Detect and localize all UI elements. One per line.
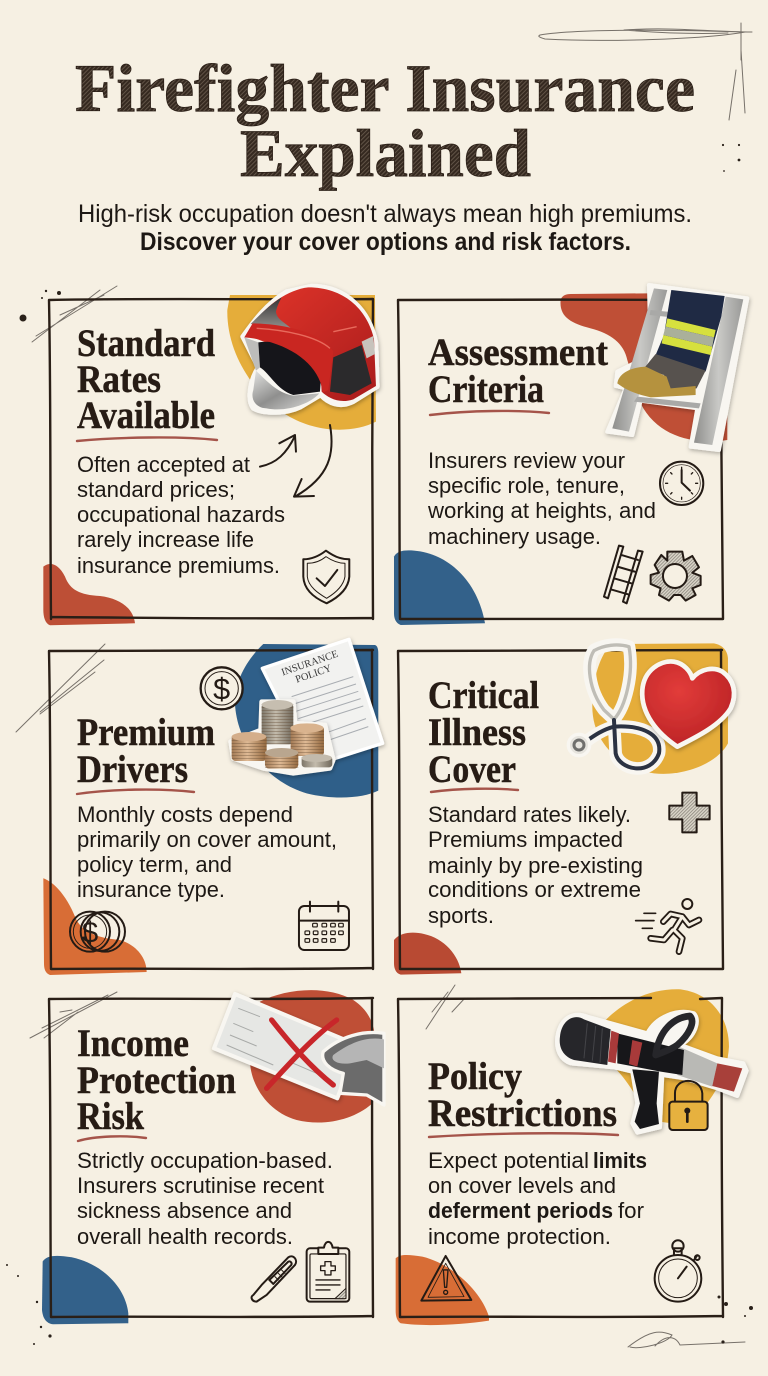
panel: policy restrictions (396, 989, 747, 1325)
body text: insurance premiums. (77, 553, 280, 578)
heading: Income (77, 1022, 189, 1065)
icon: warning triangle (421, 1256, 471, 1301)
heading: Drivers (77, 748, 188, 791)
heading: Rates (77, 358, 161, 401)
heading: Illness (428, 711, 526, 754)
body text: Insurers scrutinise recent (77, 1173, 324, 1198)
subtitle (78, 200, 692, 256)
body text: rarely increase life (77, 527, 254, 552)
icon: gear (651, 552, 701, 601)
body text: Monthly costs depend (77, 802, 293, 827)
body text: specific role, tenure, (428, 473, 625, 498)
illustration: insurance policy document: INSURANCE (280, 649, 340, 678)
body text: insurance type. (77, 877, 225, 902)
heading: Standard (77, 322, 215, 365)
body text: Expect potential (428, 1148, 589, 1173)
heading (428, 674, 539, 791)
icon: running person (636, 899, 699, 952)
icon: stacked coins (70, 912, 125, 952)
illustration: insurance policy document: POLICY (294, 663, 334, 686)
body text: policy term, and (77, 852, 232, 877)
heading: Critical (428, 674, 539, 717)
illustration: coin stacks (231, 700, 333, 773)
icon: ladder (604, 546, 643, 603)
illustration: heart (642, 661, 734, 747)
icon: medical cross (669, 793, 710, 832)
body text: primarily on cover amount, (77, 827, 337, 852)
icon: boot on ladder (607, 285, 747, 450)
body text: sports. (428, 903, 494, 928)
body text: standard prices; (77, 477, 235, 502)
body text: Insurers review your (428, 448, 625, 473)
icon: thermometer (252, 1256, 296, 1302)
body text (77, 802, 337, 902)
panel: income protection risk (42, 990, 384, 1324)
panel: premium drivers (43, 639, 383, 975)
icon: dollar badge (201, 667, 243, 709)
icon: calendar (299, 902, 349, 950)
body text: machinery usage. (428, 524, 601, 549)
body text: sickness absence and (77, 1198, 292, 1223)
arrow: up to helmet (260, 435, 296, 467)
panel: assessment criteria (394, 285, 747, 625)
illustration: stethoscope (568, 645, 659, 768)
icon: shield check (303, 551, 349, 603)
illustration: hose nozzle (557, 1012, 747, 1133)
body text: working at heights, and (427, 498, 656, 523)
panel: standard rates available (43, 286, 377, 625)
body text: limits (593, 1148, 647, 1173)
heading: Policy (428, 1055, 522, 1098)
body text: overall health records. (77, 1224, 293, 1249)
heading: Assessment (428, 331, 608, 374)
subtitle: Discover your cover options and risk factors. (140, 228, 631, 256)
title (75, 50, 695, 191)
heading: Protection (77, 1059, 236, 1102)
heading: Cover (428, 748, 516, 791)
heading: Available (77, 394, 215, 437)
heading: Restrictions (428, 1092, 617, 1135)
body text: deferment periods (428, 1198, 613, 1223)
panel: critical illness cover (394, 643, 734, 975)
body text (428, 802, 643, 928)
heading (428, 1055, 617, 1135)
body text: conditions or extreme (428, 877, 641, 902)
title: Explained (240, 115, 531, 191)
heading (77, 711, 215, 791)
icon: stopwatch (655, 1240, 701, 1302)
icon: padlock (669, 1081, 708, 1130)
heading (77, 1022, 236, 1138)
heading: Premium (77, 711, 215, 754)
body text: mainly by pre-existing (428, 853, 643, 878)
body text (77, 1148, 333, 1249)
icon: dollar badge: $ (213, 672, 230, 706)
heading: Criteria (428, 368, 544, 411)
heading: Risk (77, 1095, 144, 1138)
title: Firefighter Insurance (75, 50, 695, 126)
subtitle: High-risk occupation doesn't always mean high premiums. (78, 200, 692, 228)
arrow: curved down (294, 425, 332, 497)
icon: medical clipboard (307, 1242, 349, 1302)
body text (77, 452, 285, 578)
body text: Standard rates likely. (428, 802, 631, 827)
icon: stacked coins: $ (82, 917, 98, 950)
body text: Premiums impacted (428, 827, 623, 852)
body text: Often accepted at (77, 452, 250, 477)
icon: clock (660, 462, 703, 505)
heading (428, 331, 608, 411)
body text (428, 1148, 647, 1249)
body text: occupational hazards (77, 502, 285, 527)
body text: for (618, 1198, 644, 1223)
illustration: crossed-out cheque in hand (214, 994, 384, 1105)
body text: income protection. (428, 1224, 611, 1249)
illustration: insurance policy document (262, 639, 383, 760)
body text: on cover levels and (428, 1173, 616, 1198)
heading (77, 322, 215, 437)
icon: fire helmet (243, 286, 377, 412)
body text: Strictly occupation-based. (77, 1148, 333, 1173)
body text (427, 448, 656, 549)
